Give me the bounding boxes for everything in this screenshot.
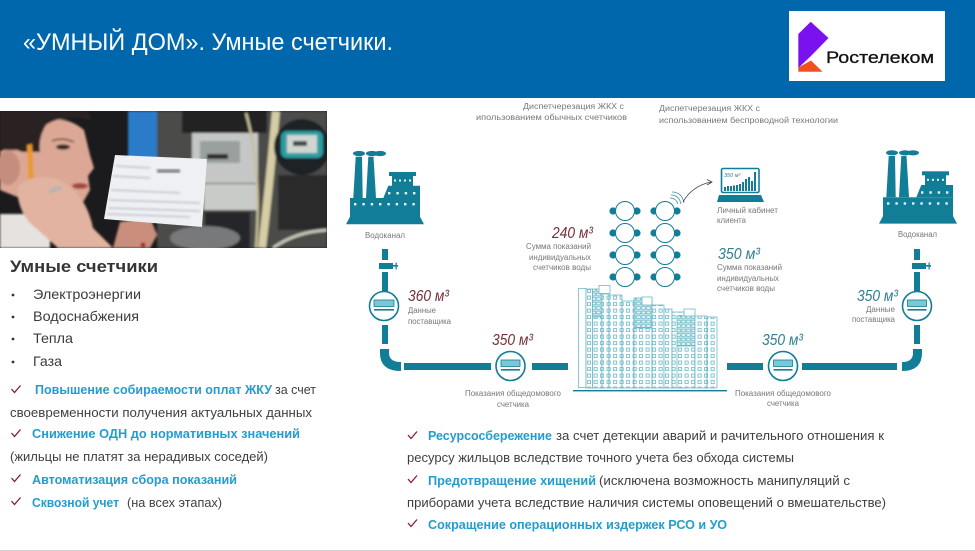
reading: 240 m3 individual meters bbox=[526, 225, 594, 272]
apartment building bbox=[573, 286, 727, 391]
reading: 350 m3 common house right: счетчика bbox=[767, 399, 800, 408]
individual meters: ordinary column bbox=[609, 202, 641, 286]
icon: laptop with chart bbox=[717, 168, 764, 202]
woman's head bbox=[0, 119, 94, 206]
benefits list left: Автоматизация сбора показаний bbox=[32, 472, 237, 487]
logo: Rostelecom bbox=[789, 11, 945, 81]
icon: laptop with chart: 350 м³ bbox=[724, 173, 740, 179]
photo: woman holding a utility bill by the meters bbox=[0, 111, 330, 250]
reading: 350 m3 common house left: 350 м³ bbox=[492, 332, 534, 349]
benefits list left: Повышение собираемости оплат ЖКУ bbox=[35, 382, 273, 397]
benefits list right: ресурсу жильцов вследствие точного учета без обхода системы bbox=[407, 450, 794, 465]
benefits list left: Сквозной учет bbox=[32, 495, 119, 510]
meter: supplier right bbox=[902, 292, 932, 320]
label: personal account: клиента bbox=[717, 216, 747, 225]
benefits list left: Снижение ОДН до нормативных значений bbox=[32, 426, 300, 441]
bill sheet bbox=[104, 155, 207, 227]
benefits list right: Сокращение операционных издержек РСО и УО bbox=[428, 517, 727, 532]
reading: 240 m3 individual meters: 240 м³ bbox=[551, 225, 594, 242]
meter types list: Электроэнергии bbox=[33, 286, 141, 302]
reading: 350 m3 supplier right: поставщика bbox=[852, 315, 896, 324]
benefits list right bbox=[407, 428, 886, 532]
reading: 350 m3 common house left: счетчика bbox=[497, 400, 530, 409]
benefits list right: приборами учета вследствие наличия системы оповещений о вмешательстве) bbox=[407, 495, 886, 510]
label: personal account bbox=[717, 206, 778, 225]
reading: 350 m3 common house right bbox=[735, 332, 832, 408]
reading: 350 m3 supplier right bbox=[852, 288, 899, 324]
meter types list bbox=[12, 286, 141, 369]
reading: 240 m3 individual meters: индивидуальных bbox=[529, 253, 591, 262]
heading: smart meters: Умные счетчики bbox=[10, 258, 158, 276]
meter: common house right bbox=[768, 352, 798, 380]
benefits list left: за счет bbox=[275, 382, 316, 397]
reading: 350 m3 individual meters: счетчиков воды bbox=[717, 284, 775, 293]
icon: factory right bbox=[879, 150, 957, 224]
reading: 360 m3: Данные bbox=[408, 306, 437, 315]
reading: 350 m3 common house left bbox=[465, 332, 562, 409]
reading: 350 m3 supplier right: Данные bbox=[866, 305, 896, 314]
arrow to personal account bbox=[683, 180, 712, 202]
reading: 350 m3 individual meters: Сумма показаний bbox=[717, 263, 782, 272]
reading: 350 m3 common house left: Показания общедомового bbox=[465, 389, 562, 398]
reading: 360 m3: поставщика bbox=[408, 317, 452, 326]
diagram caption: wireless technology: использованием беспроводной технологии bbox=[659, 116, 838, 125]
diagram caption: wireless technology bbox=[659, 104, 838, 125]
icon: factory left bbox=[346, 151, 424, 224]
title: «УМНЫЙ ДОМ». Умные счетчики. bbox=[23, 28, 393, 56]
pipeline right bbox=[727, 249, 931, 371]
reading: 360 m3 bbox=[408, 288, 452, 326]
meter: common house left bbox=[496, 352, 525, 380]
individual meters: wireless column bbox=[650, 192, 684, 286]
diagram caption: ordinary meters: ипользованием обычных счетчиков bbox=[476, 113, 627, 122]
diagram caption: ordinary meters bbox=[476, 102, 627, 122]
benefits list left: своевременности получения актуальных данных bbox=[10, 405, 313, 420]
reading: 350 m3 individual meters: индивидуальных bbox=[717, 274, 779, 283]
reading: 350 m3 individual meters bbox=[717, 246, 782, 293]
logo: Rostelecom: Ростелеком bbox=[826, 48, 934, 67]
label: water utility left: Водоканал bbox=[365, 231, 405, 240]
reading: 350 m3 individual meters: 350 м³ bbox=[718, 246, 761, 263]
reading: 350 m3 common house right: Показания общедомового bbox=[735, 389, 832, 398]
meter types list: Водоснабжения bbox=[33, 308, 139, 324]
benefits list left: (на всех этапах) bbox=[127, 495, 222, 510]
meter types list: Тепла bbox=[33, 330, 73, 346]
reading: 360 m3: 360 м³ bbox=[408, 288, 450, 305]
benefits list left bbox=[10, 382, 316, 510]
bottom rule bbox=[0, 550, 975, 551]
benefits list right: за счет детекции аварий и рачительного отношения к bbox=[556, 428, 884, 443]
benefits list right: Предотвращение хищений bbox=[428, 473, 596, 488]
pipeline left bbox=[379, 249, 568, 371]
diagram caption: ordinary meters: Диспетчерезация ЖКХ с bbox=[523, 102, 624, 111]
label: water utility right: Водоканал bbox=[898, 230, 937, 239]
header band bbox=[0, 0, 975, 98]
reading: 350 m3 common house right: 350 м³ bbox=[762, 332, 804, 349]
diagram caption: wireless technology: Диспетчерезация ЖКХ с bbox=[659, 104, 760, 113]
meter: supplier left bbox=[370, 292, 398, 320]
meter types list: Газа bbox=[33, 353, 62, 369]
benefits list left: (жильцы не платят за нерадивых соседей) bbox=[10, 449, 268, 464]
label: personal account: Личный кабинет bbox=[717, 206, 778, 215]
reading: 240 m3 individual meters: Сумма показаний bbox=[526, 242, 591, 251]
benefits list right: Ресурсосбережение bbox=[428, 428, 552, 443]
reading: 350 m3 supplier right: 350 м³ bbox=[857, 288, 899, 305]
benefits list right: (исключена возможность манипуляций с bbox=[599, 473, 851, 488]
reading: 240 m3 individual meters: счетчиков воды bbox=[533, 263, 591, 272]
